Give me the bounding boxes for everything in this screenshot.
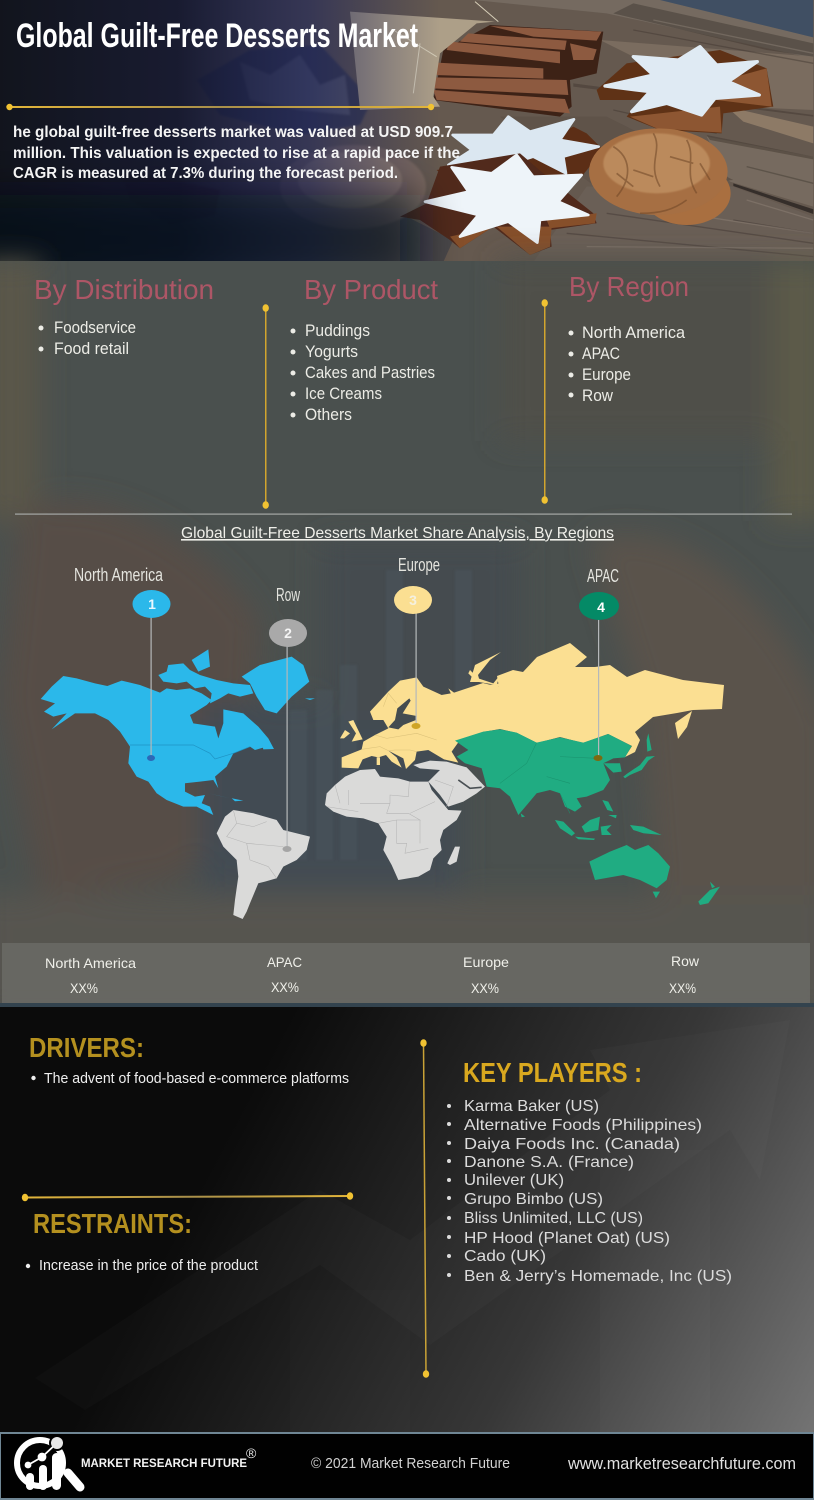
list: key players: Ben & Jerry’s Homemade, Inc (US) bbox=[464, 1268, 732, 1285]
lower panel background bbox=[0, 1007, 814, 1432]
hero title: Global Guilt-Free Desserts Market bbox=[16, 17, 418, 55]
share table: Row bbox=[671, 953, 700, 969]
list: region: APAC bbox=[582, 344, 620, 363]
pin 1: north america bbox=[74, 565, 170, 761]
hero banner photo bbox=[0, 0, 814, 285]
world map bbox=[41, 643, 724, 919]
pin 4: apac bbox=[579, 566, 619, 761]
text: drivers item: The advent of food-based e-commerce platforms bbox=[44, 1071, 349, 1087]
map heading: Global Guilt-Free Desserts Market Share Analysis, By Regions bbox=[181, 525, 614, 542]
hero summary text bbox=[13, 124, 460, 182]
registered mark: ® bbox=[246, 1445, 257, 1461]
list: key players bbox=[447, 1098, 732, 1285]
pin 2: row: 2 bbox=[284, 625, 292, 641]
pin 2: row bbox=[269, 585, 307, 852]
brand name: MARKET RESEARCH FUTURE bbox=[81, 1458, 247, 1470]
hero summary text: CAGR is measured at 7.3% during the forecast period. bbox=[13, 165, 398, 182]
panel: by region bbox=[568, 271, 689, 405]
star cookie 3 bbox=[400, 153, 597, 255]
list: key players: Bliss Unlimited, LLC (US) bbox=[464, 1210, 643, 1227]
list: region: Europe bbox=[582, 365, 631, 384]
list: key players: Karma Baker (US) bbox=[464, 1098, 599, 1115]
list: product: Others bbox=[305, 405, 352, 424]
list: key players: Grupo Bimbo (US) bbox=[464, 1191, 603, 1208]
copyright: © 2021 Market Research Future bbox=[311, 1455, 510, 1472]
list: key players: Danone S.A. (France) bbox=[464, 1154, 634, 1171]
heading: by region: By Region bbox=[569, 271, 689, 302]
list: key players: Alternative Foods (Philippines) bbox=[464, 1117, 702, 1134]
star cookie 1 bbox=[597, 47, 773, 133]
wood planks bbox=[400, 0, 813, 262]
list: product: Puddings bbox=[305, 321, 370, 340]
panel: key players bbox=[447, 1057, 732, 1285]
list: product: Yogurts bbox=[305, 342, 358, 361]
share table: XX% bbox=[271, 979, 299, 995]
panel: drivers bbox=[29, 1032, 349, 1087]
list: region: Row bbox=[582, 386, 614, 405]
heading: by distribution: By Distribution bbox=[34, 274, 214, 305]
share table: XX% bbox=[70, 980, 98, 996]
heading: restraints: RESTRAINTS: bbox=[33, 1208, 192, 1239]
region: apac bbox=[455, 729, 720, 905]
region: europe bbox=[340, 643, 724, 769]
share table: Europe bbox=[463, 954, 509, 970]
share table: APAC bbox=[267, 954, 302, 970]
list: product: Cakes and Pastries bbox=[305, 363, 435, 382]
footer bar bbox=[0, 1432, 814, 1500]
left dim elements: pine cone and walnut bbox=[120, 45, 426, 229]
pin 3: europe: 3 bbox=[409, 592, 417, 608]
list: key players: HP Hood (Planet Oat) (US) bbox=[464, 1230, 670, 1247]
list: region: North America bbox=[582, 323, 686, 342]
star cookie 2 bbox=[437, 117, 603, 190]
list: key players: Cado (UK) bbox=[464, 1248, 546, 1265]
pin 4: apac: APAC bbox=[587, 566, 619, 586]
list: product: Ice Creams bbox=[305, 384, 382, 403]
list: key players: Unilever (UK) bbox=[464, 1172, 564, 1189]
region: rest of world bbox=[217, 761, 485, 919]
icon: market research future logo bbox=[17, 1435, 80, 1490]
share table: North America bbox=[45, 955, 136, 971]
share table bbox=[2, 943, 810, 1003]
heading: by product: By Product bbox=[304, 274, 438, 305]
list: key players: Daiya Foods Inc. (Canada) bbox=[464, 1136, 680, 1153]
walnut bbox=[589, 128, 731, 225]
list: product bbox=[290, 321, 435, 424]
cinnamon sticks bbox=[350, 2, 603, 117]
pin 2: row: Row bbox=[276, 585, 301, 605]
list: distribution: Food retail bbox=[54, 339, 129, 358]
list: region bbox=[568, 323, 686, 405]
heading: key players: KEY PLAYERS : bbox=[463, 1057, 642, 1088]
panel: restraints bbox=[26, 1208, 258, 1274]
pin 1: north america: 1 bbox=[148, 596, 156, 612]
website: www.marketresearchfuture.com bbox=[567, 1454, 796, 1473]
pin 1: north america: North America bbox=[74, 565, 164, 585]
list: distribution: Foodservice bbox=[54, 318, 136, 337]
pin 3: europe bbox=[394, 555, 440, 729]
heading: drivers: DRIVERS: bbox=[29, 1032, 144, 1063]
list: distribution bbox=[38, 318, 136, 358]
pin 4: apac: 4 bbox=[597, 599, 605, 615]
panel: by distribution bbox=[34, 274, 214, 358]
share table: XX% bbox=[669, 980, 696, 996]
hero summary text: million. This valuation is expected to rise at a rapid pace if the bbox=[13, 145, 460, 162]
pin 3: europe: Europe bbox=[398, 555, 440, 575]
region: north america bbox=[41, 649, 315, 815]
middle panel background bbox=[0, 261, 814, 1015]
hero summary text: he global guilt-free desserts market was valued at USD 909.7 bbox=[13, 124, 453, 141]
hero divider line bbox=[6, 104, 434, 110]
share table: XX% bbox=[471, 980, 499, 996]
panel: by product bbox=[290, 274, 438, 424]
text: restraints item: Increase in the price of the product bbox=[39, 1258, 258, 1274]
